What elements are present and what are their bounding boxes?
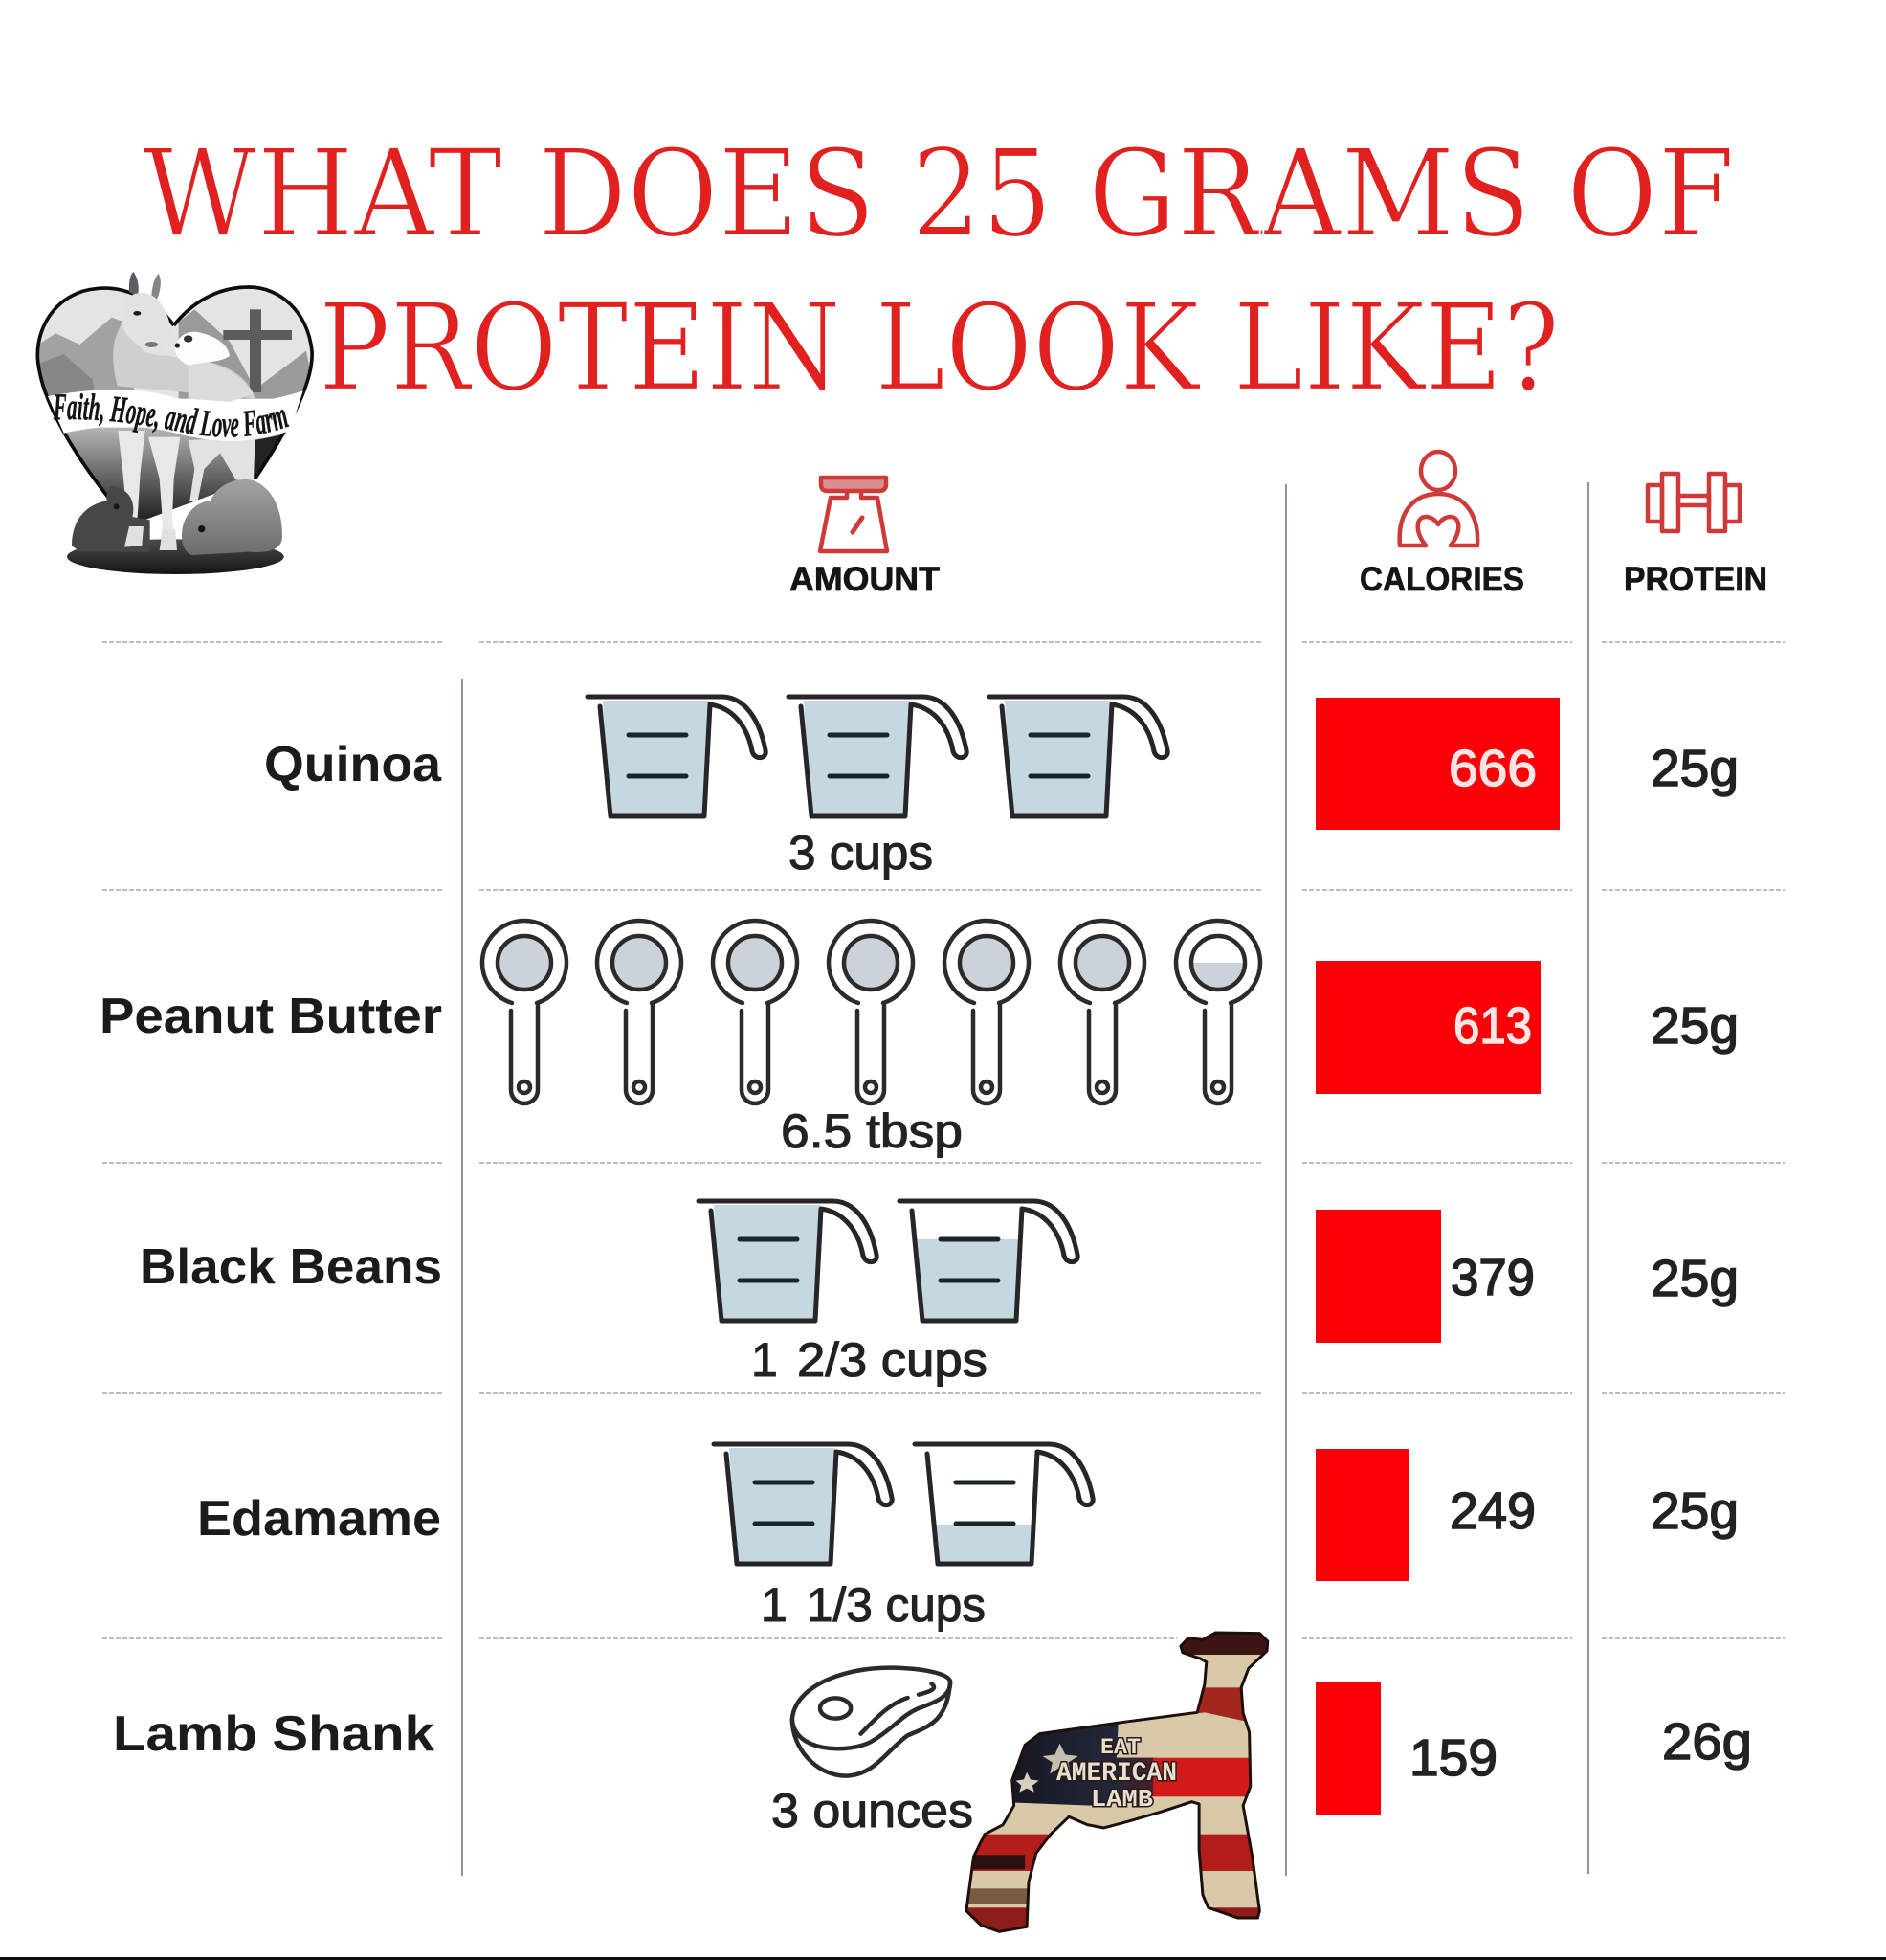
calorie value: 666 — [1449, 740, 1537, 797]
bottom edge line — [0, 1957, 1886, 1960]
food label: Peanut Butter — [100, 989, 442, 1044]
badge: Eat American Lamb flag silhouette — [959, 1627, 1275, 1936]
badge: Eat American Lamb flag silhouette: AMERICAN — [1056, 1759, 1177, 1789]
badge: Eat American Lamb flag silhouette: EAT — [1100, 1735, 1141, 1760]
calorie value: 613 — [1453, 997, 1532, 1055]
icon: one and two thirds cups — [699, 1201, 1077, 1321]
header: amount: AMOUNT — [789, 561, 940, 598]
protein value: 25g — [1651, 1250, 1739, 1307]
row: black beans — [140, 1201, 1739, 1387]
title — [143, 123, 1735, 418]
row: quinoa — [264, 697, 1739, 880]
title: PROTEIN LOOK LIKE? — [319, 278, 1560, 418]
food label: Edamame — [197, 1491, 441, 1547]
protein value: 25g — [1651, 740, 1739, 797]
amount text: 1/3 cups — [807, 1578, 986, 1632]
icon: person with heart — [1400, 452, 1477, 546]
amount text: 2/3 cups — [797, 1333, 987, 1387]
badge: Eat American Lamb flag silhouette: LAMB — [1091, 1785, 1153, 1814]
icon: steak — [792, 1668, 950, 1776]
protein value: 25g — [1651, 1482, 1739, 1540]
calorie bar — [1316, 1210, 1441, 1343]
amount text: 3 cups — [788, 826, 933, 880]
base and rabbits — [67, 539, 284, 574]
food label: Lamb Shank — [113, 1706, 434, 1762]
calorie bar — [1316, 1682, 1381, 1815]
amount text: 3 ounces — [771, 1784, 973, 1838]
column dividers — [462, 482, 1588, 1876]
header: protein — [1624, 474, 1767, 598]
protein value: 26g — [1662, 1713, 1752, 1771]
header: amount — [789, 478, 940, 598]
row: peanut butter — [100, 921, 1739, 1158]
amount text: 1 — [751, 1333, 778, 1387]
calorie value: 159 — [1409, 1729, 1498, 1787]
row: lamb shank — [113, 1668, 1752, 1838]
row separators — [102, 642, 1785, 1638]
icon: one and one third cups — [714, 1444, 1093, 1564]
heart outline — [37, 287, 312, 498]
icon: kitchen scale — [820, 478, 887, 551]
protein value: 25g — [1651, 997, 1739, 1055]
header: calories — [1360, 452, 1524, 598]
food label: Black Beans — [140, 1239, 442, 1295]
calorie bar — [1316, 961, 1541, 1094]
logo: Faith, Hope and Love Farm heart — [35, 272, 314, 574]
dog — [175, 332, 230, 366]
row: edamame — [197, 1444, 1739, 1632]
title: WHAT DOES 25 GRAMS OF — [143, 123, 1735, 264]
icon: three measuring cups — [588, 697, 1167, 816]
banner: Faith, Hope, and Love Farm — [54, 392, 289, 437]
calorie bar — [1316, 698, 1560, 830]
calorie bar — [1316, 1449, 1409, 1581]
calorie value: 249 — [1450, 1482, 1536, 1540]
icon: seven tablespoons — [482, 921, 1260, 1103]
header: protein: PROTEIN — [1624, 561, 1767, 598]
header: calories: CALORIES — [1360, 561, 1524, 598]
icon: dumbbell — [1648, 474, 1740, 531]
calorie value: 379 — [1451, 1249, 1535, 1306]
horse — [113, 272, 255, 550]
amount text: 6.5 tbsp — [781, 1104, 963, 1158]
food label: Quinoa — [264, 737, 442, 792]
amount text: 1 — [761, 1578, 788, 1632]
